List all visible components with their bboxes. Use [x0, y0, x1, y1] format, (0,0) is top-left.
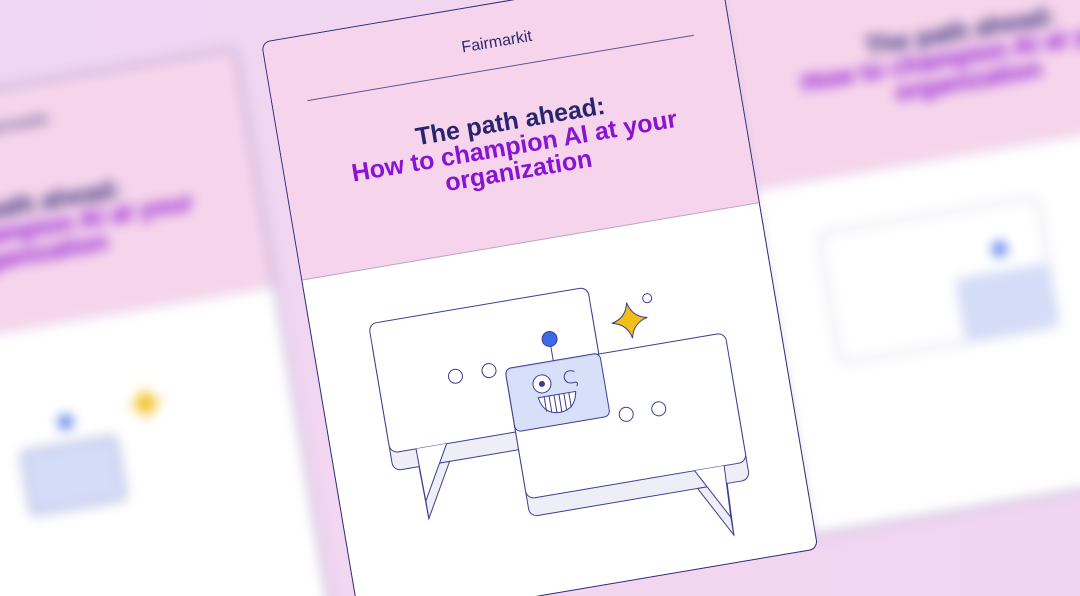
small circle	[642, 293, 652, 303]
blurred background card: right: The path ahead:	[863, 2, 1057, 61]
subtitle: organization	[443, 145, 594, 197]
blurred background card: right	[711, 0, 1080, 537]
subtitle: How to champion AI at your	[350, 105, 679, 187]
blurred background card: right: organization	[893, 55, 1044, 107]
sparkle	[609, 300, 650, 341]
left bubble	[369, 287, 621, 523]
card header: pink area	[262, 0, 759, 280]
brand name: Fairmarkit	[460, 28, 533, 56]
title: The path ahead:	[413, 92, 607, 151]
right bubble	[505, 333, 758, 568]
robot face	[500, 324, 610, 432]
blurred background card: left	[0, 47, 334, 596]
main card	[261, 0, 818, 596]
illustration: chat bubbles with robot	[369, 288, 750, 537]
